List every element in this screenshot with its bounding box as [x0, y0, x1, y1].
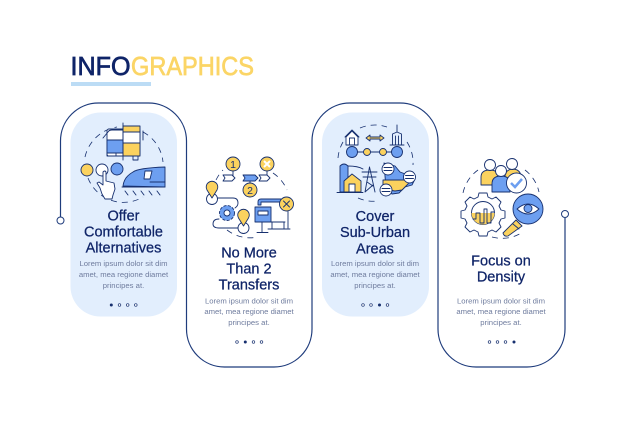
text block 1: principes at.: [103, 281, 144, 290]
heading: offer comfortable alternatives: Comfortable: [84, 224, 163, 240]
heading: focus on density: [471, 254, 531, 286]
title: INFO: [70, 53, 130, 81]
heading: no more than 2 transfers: No More: [221, 246, 277, 262]
text block 2: principes at.: [228, 318, 270, 327]
title: [70, 53, 254, 86]
heading: no more than 2 transfers: Than 2: [226, 262, 272, 278]
heading: focus on density: Focus on: [471, 254, 531, 270]
heading: offer comfortable alternatives: Offer: [108, 208, 140, 224]
icon: people and density magnifier: [461, 158, 543, 238]
heading: no more than 2 transfers: Transfers: [219, 278, 279, 294]
text block 2: Lorem ipsum dolor sit dim: [205, 296, 293, 306]
text block 2: [204, 296, 295, 327]
text block 4: [456, 296, 547, 327]
text block 4: principes at.: [480, 318, 522, 327]
text block 3: Lorem ipsum dolor sit dim: [331, 259, 419, 268]
text block 4: Lorem ipsum dolor sit dim: [457, 296, 545, 306]
text block 1: Lorem ipsum dolor sit dim: [79, 259, 168, 268]
icon: route with two transfers and bus stop: 1: [230, 159, 236, 171]
text block 2: amet, mea regione diamet: [204, 307, 295, 316]
icon: suburb connection: [337, 125, 416, 201]
heading: focus on density: Density: [477, 270, 526, 286]
text block 4: amet, mea regione diamet: [456, 307, 547, 316]
heading: offer comfortable alternatives: Alternatives: [86, 240, 161, 256]
pagination dots 2: [236, 340, 263, 344]
icon: route with two transfers and bus stop: 2: [247, 185, 253, 197]
heading: cover sub-urban areas: Areas: [356, 242, 394, 258]
text block 3: amet, mea regione diamet: [330, 270, 421, 279]
heading: no more than 2 transfers: [219, 246, 279, 294]
heading: offer comfortable alternatives: [84, 208, 163, 256]
text block 3: [330, 259, 421, 290]
icon: bus, train and hand: [81, 123, 165, 202]
text block 1: amet, mea regione diamet: [79, 270, 169, 279]
text block 1: [79, 259, 169, 290]
pagination dots 1: [110, 304, 137, 306]
pagination dots 3: [362, 304, 389, 306]
heading: cover sub-urban areas: [340, 209, 410, 258]
snake outline connector: [57, 103, 568, 367]
panel backgrounds: [70, 112, 429, 316]
title: GRAPHICS: [131, 53, 254, 81]
icon: route with two transfers and bus stop: [206, 157, 294, 238]
pagination dots 4: [488, 340, 516, 344]
heading: cover sub-urban areas: Sub-Urban: [340, 225, 410, 241]
text block 3: principes at.: [354, 281, 396, 290]
heading: cover sub-urban areas: Cover: [356, 209, 395, 225]
